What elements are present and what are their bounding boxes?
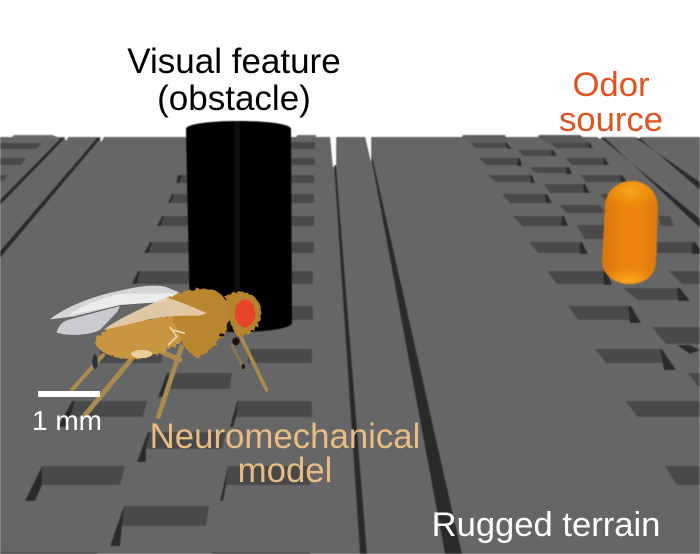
fly thorax: [167, 289, 230, 358]
terrain holes: left field: [0, 142, 315, 554]
label: neuromechanical model: model: [238, 451, 332, 490]
rugged terrain ground: [0, 135, 700, 554]
white notches on the terrain edge: [64, 135, 69, 141]
fly eye: [235, 299, 255, 327]
fly abdomen: [95, 315, 182, 359]
label: odor source: source: [559, 101, 663, 139]
terrain holes: right field: [470, 143, 700, 485]
long terrain slots: [0, 138, 700, 554]
scale bar label: 1 mm: [32, 405, 102, 436]
icon: orange capsule odor source: [602, 181, 658, 284]
label: rugged terrain: Rugged terrain: [432, 506, 660, 544]
icon: fruit fly neuromechanical model: [50, 286, 267, 417]
fly head: [225, 292, 261, 337]
label: odor source: Odor: [572, 66, 650, 104]
icon: black cylinder obstacle: [186, 121, 292, 332]
label: visual feature: (obstacle): [157, 79, 311, 118]
fly legs: [72, 335, 267, 417]
fly dark joints: [92, 322, 245, 369]
scale bar: [38, 391, 100, 397]
label: neuromechanical model: Neuromechanical: [150, 417, 420, 456]
fly thorax highlights: [168, 327, 185, 345]
fly rear wings: [50, 286, 180, 335]
fly front wing: [103, 297, 207, 330]
fly abdomen underside: [131, 350, 152, 358]
label: visual feature: Visual feature: [127, 42, 341, 81]
